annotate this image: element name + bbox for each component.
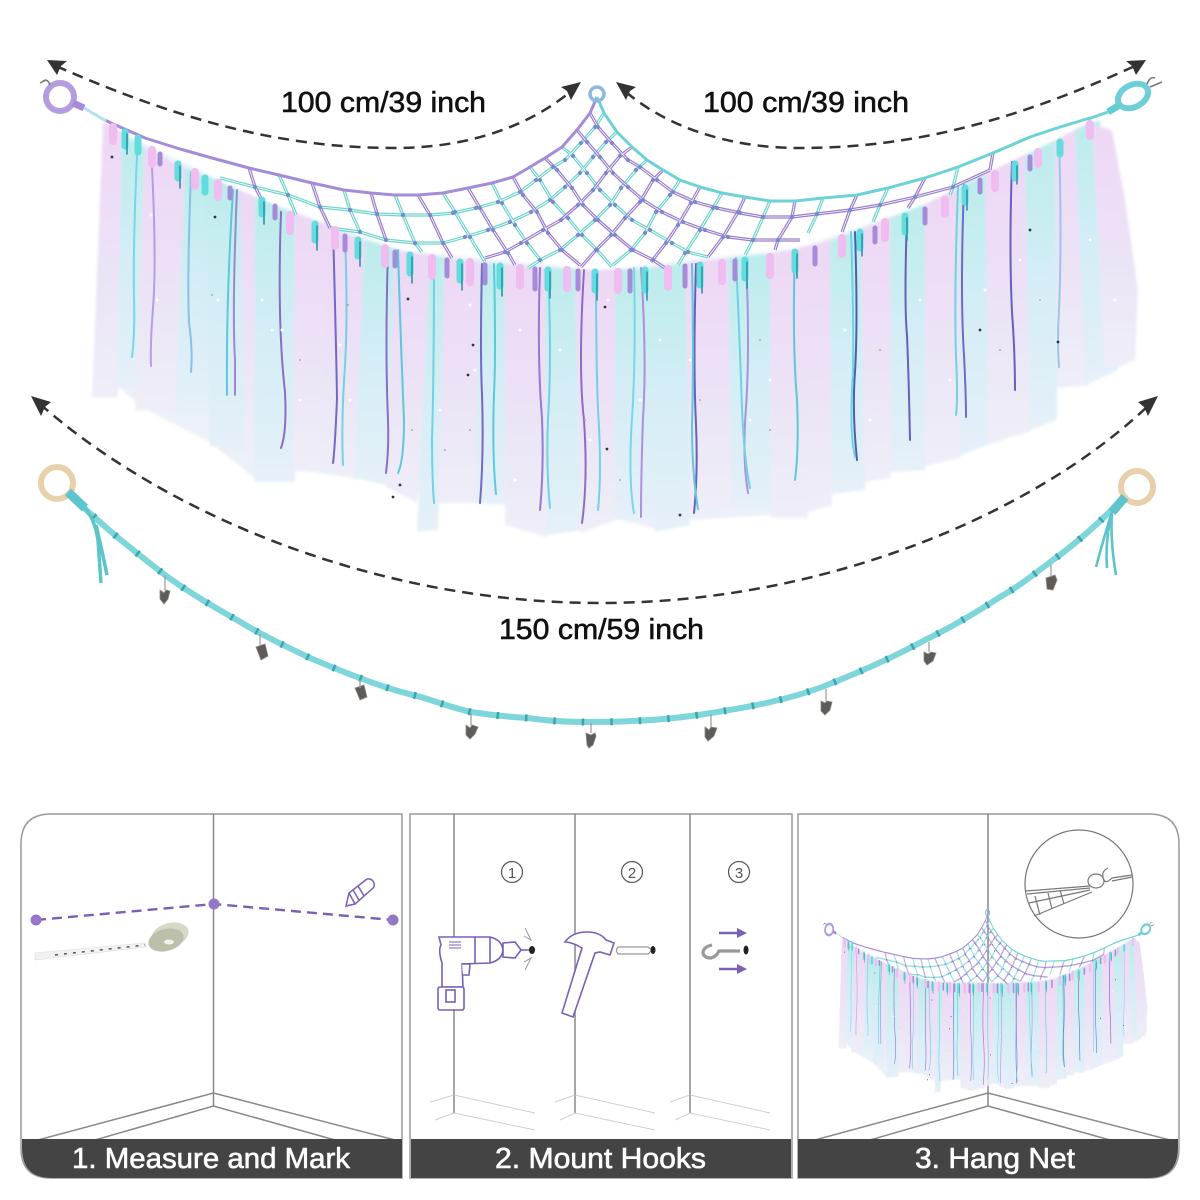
apex ring [590, 87, 604, 101]
hanging threads [132, 135, 1060, 523]
hole with sparks [524, 928, 535, 970]
panel frame [410, 814, 792, 1178]
icon: pencil [346, 879, 374, 906]
step number 1: 1 [508, 865, 516, 882]
step number 3: 3 [735, 865, 743, 882]
panel frame [798, 814, 1179, 1178]
product photo: macrame clip garland [41, 467, 1153, 748]
dimension arrow: left 100 cm [47, 60, 581, 148]
tape measure [35, 918, 191, 960]
mark dots [30, 898, 398, 926]
step number 2: 2 [628, 865, 636, 882]
caption bar [411, 1139, 791, 1178]
mini hanging net [823, 909, 1154, 1093]
wall anchor [616, 946, 656, 954]
step number 1 [502, 862, 522, 882]
step number 2 [622, 862, 642, 882]
panel: step 2 mount hooks [410, 814, 792, 1178]
wooden ring left [41, 467, 73, 499]
panel: step 3 hang net [798, 814, 1179, 1178]
macrame net mesh [220, 113, 993, 268]
eye hook [703, 945, 748, 958]
wooden ring right [1121, 471, 1153, 503]
product photo: macrame net with tulle fringe [40, 78, 1162, 537]
clip hangers [165, 565, 1051, 733]
fringe knots along net edge [113, 124, 1090, 300]
wall corner lines [38, 814, 395, 1140]
wall corner lines [815, 814, 1170, 1140]
dimension arrow: right 100 cm [616, 60, 1146, 148]
dashed measuring line [36, 904, 393, 920]
wall corner lines [454, 814, 690, 1113]
panel frame [21, 814, 402, 1178]
top ropes [105, 97, 1090, 201]
panel: step 1 measure and mark [21, 814, 402, 1178]
dimension arrow: 150 cm [31, 396, 1158, 603]
step number 3 [728, 862, 750, 882]
tulle fringe strips [92, 120, 1138, 537]
caption bar [22, 1139, 402, 1178]
metal clips [160, 575, 1057, 748]
label: 150 cm/59 inch: 150 cm/59 inch [499, 614, 704, 646]
caption bar [798, 1139, 1178, 1178]
label: 100 cm/39 inch left: 100 cm/39 inch [281, 87, 486, 119]
label: 100 cm/39 inch right: 100 cm/39 inch [703, 87, 909, 119]
push arrow top [719, 928, 747, 938]
right hanging ring [1088, 78, 1162, 119]
caption text: 1. Measure and Mark [72, 1143, 351, 1175]
icon: hammer [562, 932, 614, 1017]
left hanging ring [40, 80, 106, 121]
caption text: 3. Hang Net [915, 1143, 1075, 1175]
caption text: 2. Mount Hooks [495, 1143, 706, 1175]
braided rope [68, 492, 1125, 722]
icon: drill [438, 937, 530, 1010]
sequins [151, 215, 1115, 480]
floor lines fading [430, 1095, 770, 1130]
push arrow bottom [719, 964, 747, 974]
callout: hook detail [1025, 830, 1133, 938]
